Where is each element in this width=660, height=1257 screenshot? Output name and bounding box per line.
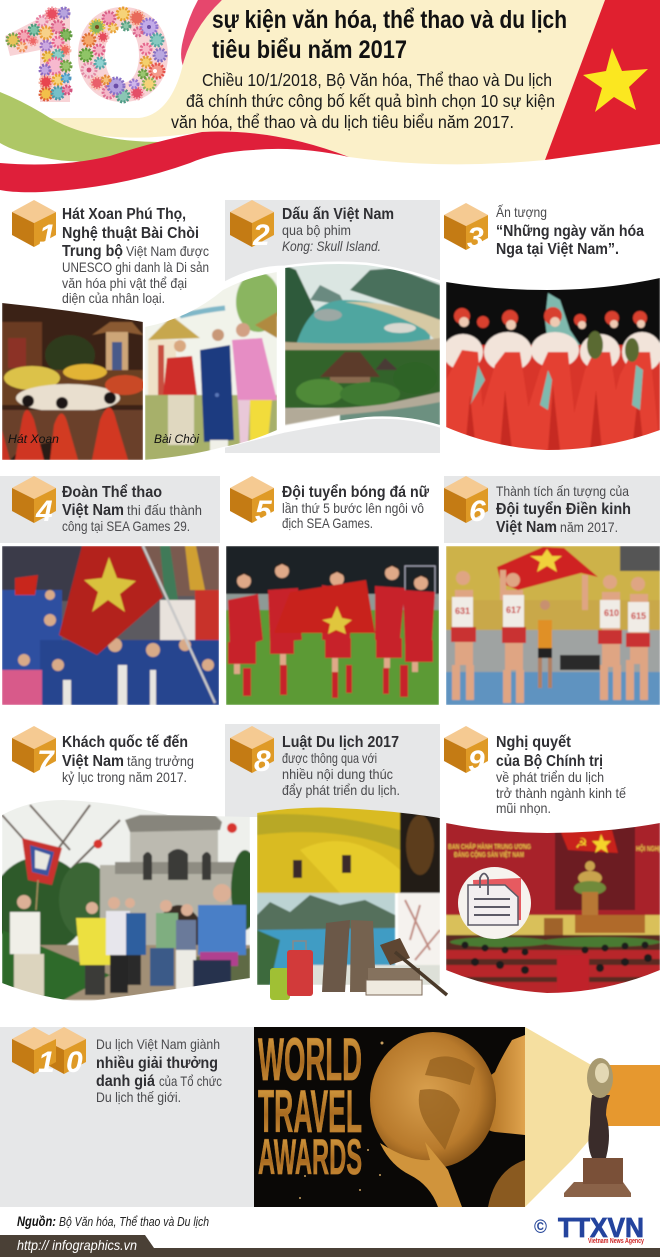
text: item 6: năm 2017. [560,519,618,535]
photo: Vietnamese delegation with flag [2,546,219,705]
item 8 [230,726,447,1000]
icon: cube 4: 4 [35,495,53,528]
item 6 [444,476,660,705]
runners: 610 [604,608,619,618]
cream background [44,0,605,164]
title: tiêu biểu năm 2017 [212,36,407,64]
text: item 1: UNESCO ghi danh là Di sản [62,259,209,275]
icon: cube 8 [230,726,274,778]
text: item 7 [62,734,194,785]
text: item 2: qua bộ phim [282,222,351,238]
photo collage: tourism law [257,805,447,1000]
item 10 [12,1026,660,1207]
item 2 [230,200,440,430]
icon: cube 3 [444,203,488,255]
text: item 9: Nghị quyết [496,734,572,751]
text: item 1: văn hóa phi vật thể đại [62,275,187,291]
icon: cube 4 [12,476,56,528]
text: item 4: Việt Nam [62,502,124,519]
text: item 8: đẩy phát triển du lịch. [282,782,400,798]
text: item 1: Nghệ thuật Bài Chòi [62,225,199,242]
icon: resolution document badge [458,867,531,939]
photo: party congress hall: ĐẢNG CỘNG SẢN VIỆT NAM [454,850,524,859]
photo: World Travel Awards: TRAVEL [258,1078,362,1145]
item 9 [444,726,660,995]
digit base shapes [5,7,168,102]
icon: suitcases [270,941,313,1000]
item 1 [2,200,280,460]
photo: party congress hall: BAN CHẤP HÀNH TRUNG ƯƠNG [448,841,531,851]
text: item 10: danh giá [96,1073,155,1090]
text: item 4: Đoàn Thể thao [62,483,162,501]
text: item 1: Hát Xoan Phú Thọ, [62,206,186,223]
text: item 5: lần thứ 5 bước lên ngôi vô [282,500,424,516]
intro text: văn hóa, thể thao và du lịch tiêu biểu năm 2017. [171,112,514,132]
text: item 8: Luật Du lịch 2017 [282,734,399,751]
text: item 8 [282,734,400,798]
runners [451,570,650,703]
icon: cube 5 [230,476,274,528]
caption: Hát Xoan: Hát Xoan [8,432,59,446]
flag corner [545,0,660,160]
text: item 7: kỷ lục trong năm 2017. [62,769,187,785]
text: item 6: Việt Nam [496,519,557,536]
icon: cube 9 [444,726,488,778]
title: sự kiện văn hóa, thể thao và du lịch [212,6,567,34]
text: item 7: Việt Nam [62,753,124,770]
icon: cube 8: 8 [254,745,271,778]
icon: cube 10 [12,1027,86,1079]
text: item 10: nhiều giải thưởng [96,1055,218,1072]
photo: World Travel Awards [254,1026,525,1207]
text: item 8: nhiều nội dung thúc [282,766,393,782]
photo: party congress hall: ☭ [575,835,588,851]
icon: cube 7 [12,726,56,778]
photo: World Travel Awards: WORLD [258,1026,362,1093]
footer source [17,1213,209,1229]
icon: cube 3: 3 [467,222,484,255]
text: item 6 [496,483,631,536]
green swoosh [0,92,164,161]
text: item 9: trở thành ngành kinh tế [496,785,626,801]
footer bar: http:// infographics.vn [17,1237,137,1253]
footer source: Nguồn: [17,1213,56,1229]
text: item 9: mũi nhọn. [496,800,551,816]
photo: Bài Chòi [145,270,280,460]
text: item 6: Đội tuyển Điền kinh [496,500,631,518]
text: item 7: Khách quốc tế đến [62,734,188,751]
photo: Ha Long bay and temple [285,262,440,430]
title [212,6,567,64]
tourists [10,884,246,1000]
header banner [0,0,660,192]
icon: cube 1: 1 [39,219,56,252]
caption: Bài Chòi: Bài Chòi [154,432,199,446]
icon: law books [322,920,422,995]
text: item 6: Thành tích ấn tượng của [496,483,629,499]
text: item 5: Đội tuyển bóng đá nữ [282,483,429,501]
text: item 3: Ấn tượng [496,204,547,220]
intro text [171,70,555,132]
flag star [583,48,648,112]
text: item 1 [62,206,209,306]
icon: cube 10: 1 [38,1046,55,1079]
icon: cube 1 [12,200,56,252]
award title [258,1026,362,1185]
text: item 2 [282,206,394,254]
text: item 3 [496,204,644,258]
pink swoosh [181,0,222,72]
text: item 3: Nga tại Việt Nam”. [496,241,619,258]
white photo edge waves [225,264,440,445]
item 4 [2,476,219,705]
text: item 5: địch SEA Games. [282,515,373,531]
text: item 1: Trung bộ [62,243,123,260]
runners: 615 [631,611,646,621]
text: item 4: thi đấu thành [127,502,202,518]
decorative number 10 [5,7,168,102]
text: item 2: Kong: Skull Island. [282,238,381,254]
text: item 1: diện của nhân loại. [62,290,165,306]
photo: athletes with flag [446,546,660,705]
photo: women's football team [226,546,439,705]
icon: cube 5: 5 [255,495,273,528]
text: item 1: Việt Nam được [126,243,209,259]
photo: World Travel Awards: AWARDS [258,1129,362,1185]
logo: TTXVN: © [534,1217,547,1238]
text: item 3: “Những ngày văn hóa [496,223,644,240]
orange band [593,1065,660,1126]
icon: cube 6 [444,476,488,528]
text: item 10: của Tổ chức [159,1073,222,1089]
item 3 [443,203,660,455]
icon: cube 2 [230,200,274,252]
text: item 9: của Bộ Chính trị [496,753,603,770]
text: item 4 [62,483,202,534]
intro text: Chiều 10/1/2018, Bộ Văn hóa, Thể thao và Du lịch [202,70,552,90]
text: item 9: về phát triển du lịch [496,769,604,785]
icon: cube 9: 9 [468,745,485,778]
text: item 9 [496,734,626,816]
text: item 4: công tại SEA Games 29. [62,518,190,534]
photo: Hát Xoan [2,300,145,460]
text: item 10 [96,1036,222,1105]
photo: party congress hall [446,820,660,995]
callout wedge [525,1027,598,1207]
digit 1 flowers [7,8,71,100]
runners: 631 [455,606,470,616]
footer bar [0,1235,660,1257]
players [228,563,435,698]
footer source: Bộ Văn hóa, Thể thao và Du lịch [59,1214,209,1229]
text: item 10: Du lịch Việt Nam giành [96,1036,220,1052]
digit 0 flowers [80,8,166,102]
icon: gavel [380,938,447,995]
photo: tourists at Temple of Literature [0,798,259,1002]
item 5 [226,476,439,705]
intro text: đã chính thức công bố kết quả bình chọn 10 sự kiện [186,91,555,111]
red swoosh [0,132,349,192]
text: item 5 [282,483,429,531]
runners: 617 [506,605,521,615]
icon: trophy [564,1058,631,1197]
icon: cube 2: 2 [252,219,270,252]
text: item 10: Du lịch thế giới. [96,1089,181,1105]
text: item 7: tăng trưởng [127,753,194,769]
text: item 8: được thông qua với [282,750,377,766]
icon: cube 10: 0 [66,1046,83,1079]
globe and face [370,1032,525,1207]
item 7 [0,726,259,1002]
icon: cube 6: 6 [469,495,486,528]
logo: TTXVN: TTXVN [558,1212,644,1243]
text: item 2: Dấu ấn Việt Nam [282,206,394,223]
icon: cube 7: 7 [37,745,55,778]
photo: Russian dancers [443,275,660,455]
